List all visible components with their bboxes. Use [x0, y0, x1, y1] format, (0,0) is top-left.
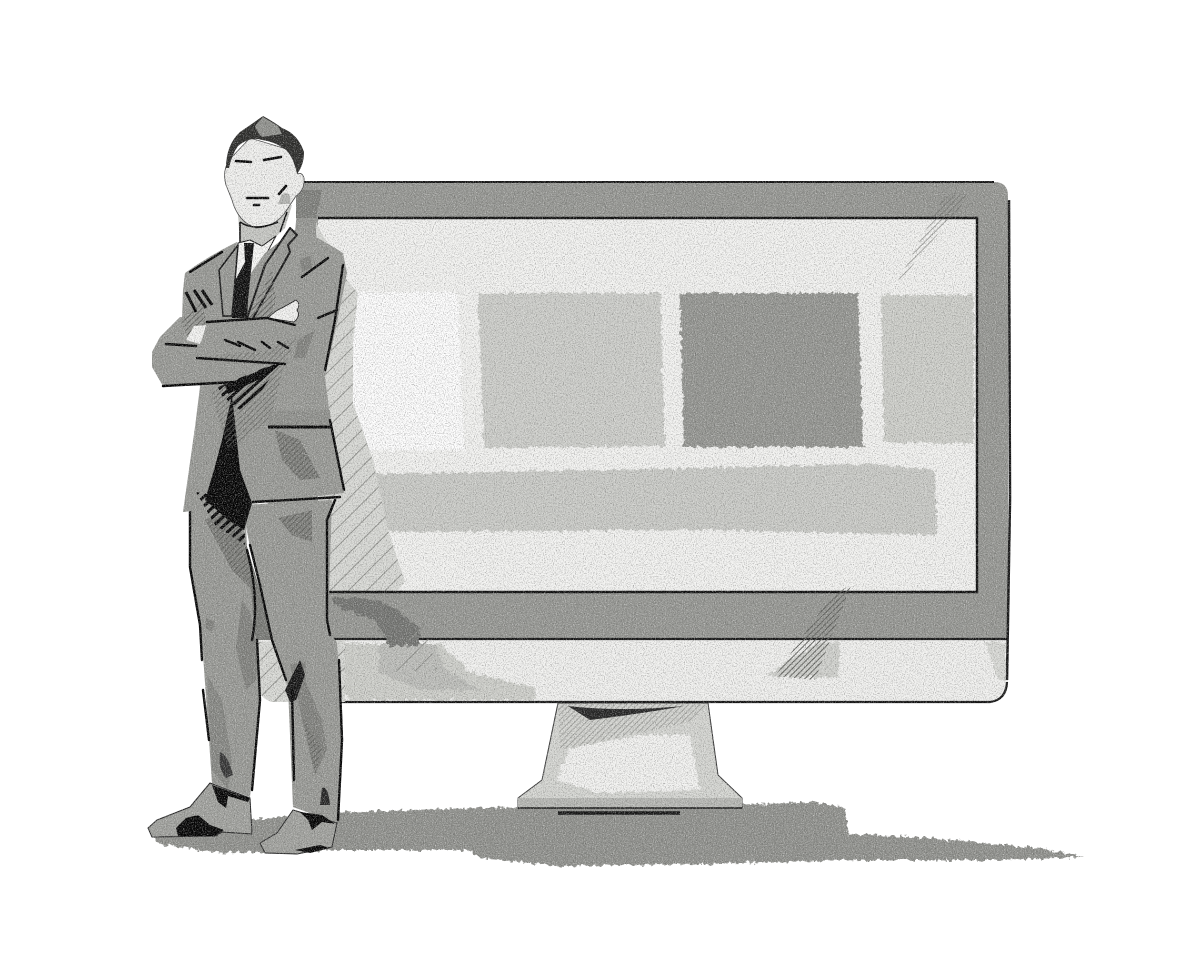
lapels [219, 245, 238, 316]
trouser shading [205, 505, 330, 805]
fill between legs [245, 540, 275, 640]
crossed arms: lower arm [152, 317, 240, 386]
hair [226, 116, 304, 174]
crossed arms: upper arm [197, 318, 337, 363]
neck [238, 205, 292, 250]
monitor screen [300, 182, 994, 592]
screen banner [370, 464, 937, 535]
glare: bottom right [775, 583, 852, 680]
monitor chin [254, 640, 1008, 702]
jacket shading [246, 270, 276, 320]
glare: top right [893, 195, 970, 290]
ground shadow [152, 802, 1085, 866]
right hand [267, 300, 299, 322]
tie [230, 243, 254, 318]
screen block: cropped right [881, 295, 974, 444]
shoe blacks [176, 785, 335, 853]
trouser ink lines [190, 500, 342, 820]
face features [236, 157, 286, 205]
arm ink strokes [163, 252, 344, 502]
shirt [232, 236, 276, 300]
monitor body [254, 182, 1008, 702]
man's cast shadow on chin [254, 640, 345, 702]
trouser: right leg [242, 500, 342, 823]
monitor stand [518, 703, 742, 813]
monitor right edge [1007, 200, 1010, 680]
screen block: light grey [478, 293, 665, 448]
chin hatching [385, 618, 438, 672]
face [225, 138, 304, 228]
shadow on monitor frame [332, 598, 420, 646]
right shoe [260, 810, 337, 854]
screen block: dark grey [680, 293, 863, 447]
monitor bottom lines [330, 639, 1008, 702]
suit jacket [182, 228, 347, 512]
left shoe [148, 783, 252, 837]
pocket flap [268, 410, 331, 426]
screen block: white [340, 292, 464, 450]
trouser: left leg [190, 505, 260, 797]
man's cast shadow on screen [316, 222, 405, 592]
monitor [254, 182, 1010, 813]
left hand [186, 325, 208, 344]
jacket opening [205, 395, 252, 530]
man [148, 116, 347, 854]
